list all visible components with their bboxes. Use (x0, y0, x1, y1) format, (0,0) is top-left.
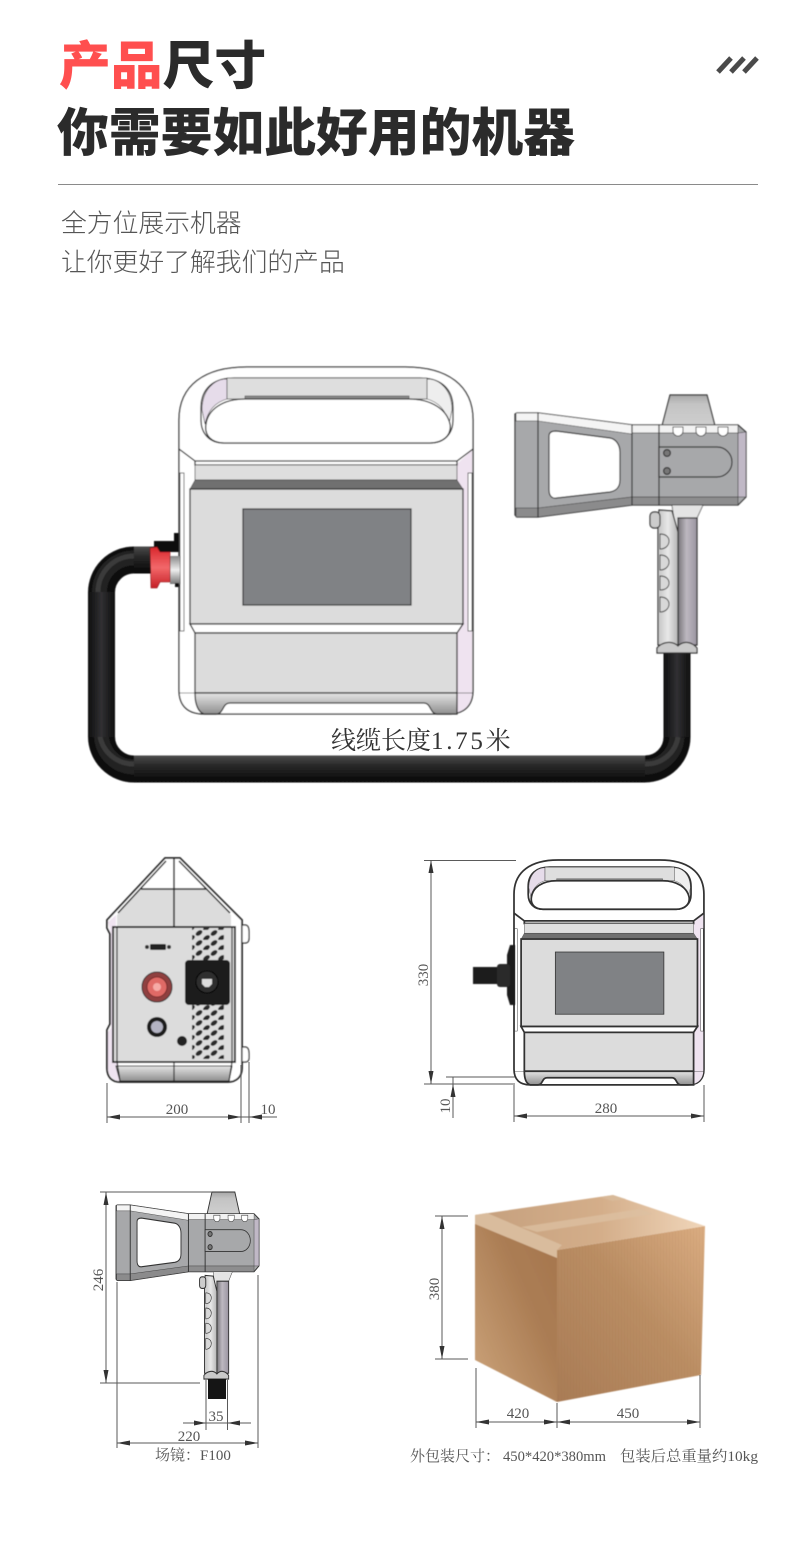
cable length label: 线缆长度1.75米 (331, 727, 511, 755)
cable connector (150, 533, 180, 588)
dimensions: rear view: 10 (260, 1102, 276, 1118)
front view machine small (514, 860, 704, 1085)
subtitle text: 让你更好了解我们的产品 (61, 248, 345, 277)
dimensions: box (427, 1216, 700, 1428)
dimensions: gun (91, 1192, 258, 1448)
dimensions: front view: 280 (595, 1101, 617, 1117)
dimensions: gun: 246 (91, 1268, 107, 1291)
dimensions: gun: 35 (208, 1409, 224, 1425)
side knobs (242, 925, 249, 1062)
package caption: 450*420*380mm (503, 1449, 606, 1465)
subtitle text (61, 209, 345, 277)
package caption (410, 1448, 758, 1465)
subtitle text: 全方位展示机器 (61, 209, 242, 238)
dimensions: front view: 10 (438, 1098, 454, 1114)
icon: three slashes (718, 58, 757, 72)
title: 你需要如此好用的机器 (57, 104, 575, 162)
dimensions: box: 420 (507, 1406, 529, 1422)
title: 产品尺寸 (59, 37, 266, 95)
connector small (473, 945, 515, 1005)
dimensions: box: 450 (617, 1406, 639, 1422)
title (57, 37, 575, 162)
main machine front view (179, 367, 473, 714)
cable (88, 546, 690, 782)
dimensions: front view (416, 860, 704, 1122)
gun small view (116, 1192, 259, 1379)
carton box (475, 1195, 705, 1402)
dimensions: front view: 330 (416, 964, 432, 986)
package caption: 外包装尺寸： (410, 1448, 500, 1465)
dimensions: rear view: 200 (166, 1102, 188, 1118)
vent holes (192, 928, 224, 1059)
package caption: 包装后总重量约10kg (620, 1448, 758, 1465)
handheld gun side view (515, 395, 746, 653)
red connector (142, 972, 172, 1002)
gun cable stub (208, 1379, 226, 1399)
d-sub port (145, 944, 171, 950)
dimensions: gun: 220 (178, 1429, 200, 1445)
dimensions: rear view (107, 1062, 277, 1123)
rear view machine (107, 858, 249, 1082)
lens label: 场镜：F100 (155, 1446, 231, 1464)
dimensions: box: 380 (427, 1278, 443, 1300)
optical port block (185, 960, 230, 1005)
round ports (147, 1017, 187, 1046)
